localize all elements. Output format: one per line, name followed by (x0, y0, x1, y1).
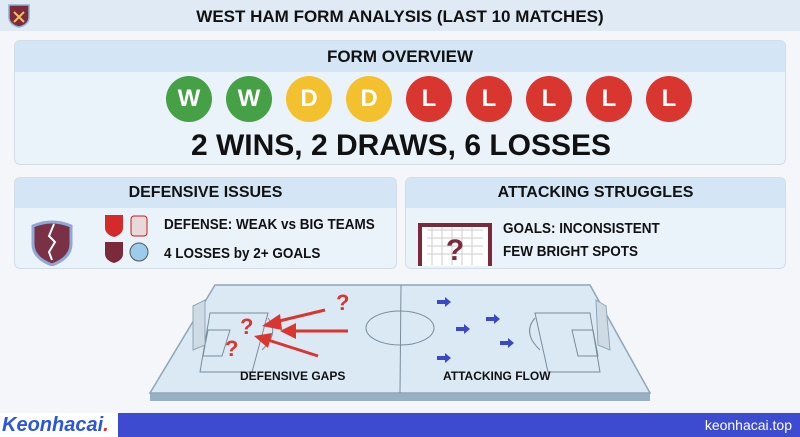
panel: attacking struggles: FEW BRIGHT SPOTS (503, 243, 638, 260)
form circles: L (542, 85, 556, 112)
red arrows (254, 310, 348, 356)
goals (193, 300, 205, 350)
brand logo: Keonhacai. (2, 414, 109, 436)
panel: form overview (14, 40, 786, 165)
panel: defensive issues: DEFENSIVE ISSUES (129, 184, 282, 201)
pitch diagram: ? (336, 290, 349, 315)
panel: defensive issues (14, 177, 397, 269)
title: WEST HAM FORM ANALYSIS (LAST 10 MATCHES) (196, 7, 604, 26)
form circles: D (360, 85, 378, 112)
header bar (0, 0, 800, 31)
icon: club crests (105, 215, 148, 263)
footer (0, 413, 800, 437)
form circles: W (178, 85, 200, 112)
pitch diagram: ATTACKING FLOW (443, 369, 551, 383)
panel: defensive issues: 4 LOSSES by 2+ GOALS (164, 245, 320, 262)
form circles: L (662, 85, 676, 112)
form circles: D (300, 85, 318, 112)
panel: attacking struggles: ATTACKING STRUGGLES (498, 184, 693, 201)
icon: goal with question mark (418, 223, 492, 266)
form circles: W (238, 85, 260, 112)
icon: west ham crest (8, 4, 30, 28)
form circles (166, 76, 692, 122)
summary text: 2 WINS, 2 DRAWS, 6 LOSSES (191, 129, 611, 162)
pitch diagram: ? (240, 314, 253, 339)
pitch diagram: ? (225, 336, 238, 361)
attacking text: GOALS: INCONSISTENT (503, 220, 660, 237)
form circles: L (482, 85, 496, 112)
form circles: L (422, 85, 436, 112)
form circles: L (602, 85, 616, 112)
pitch diagram: DEFENSIVE GAPS (240, 369, 345, 383)
icon: broken shield (32, 220, 72, 266)
panel: attacking struggles (405, 177, 786, 269)
defensive text: DEFENSE: WEAK vs BIG TEAMS (164, 216, 375, 233)
footer url: keonhacai.top (705, 417, 792, 433)
blue arrows (437, 297, 514, 363)
panel: form overview: FORM OVERVIEW (327, 47, 473, 66)
pitch diagram (148, 284, 652, 401)
